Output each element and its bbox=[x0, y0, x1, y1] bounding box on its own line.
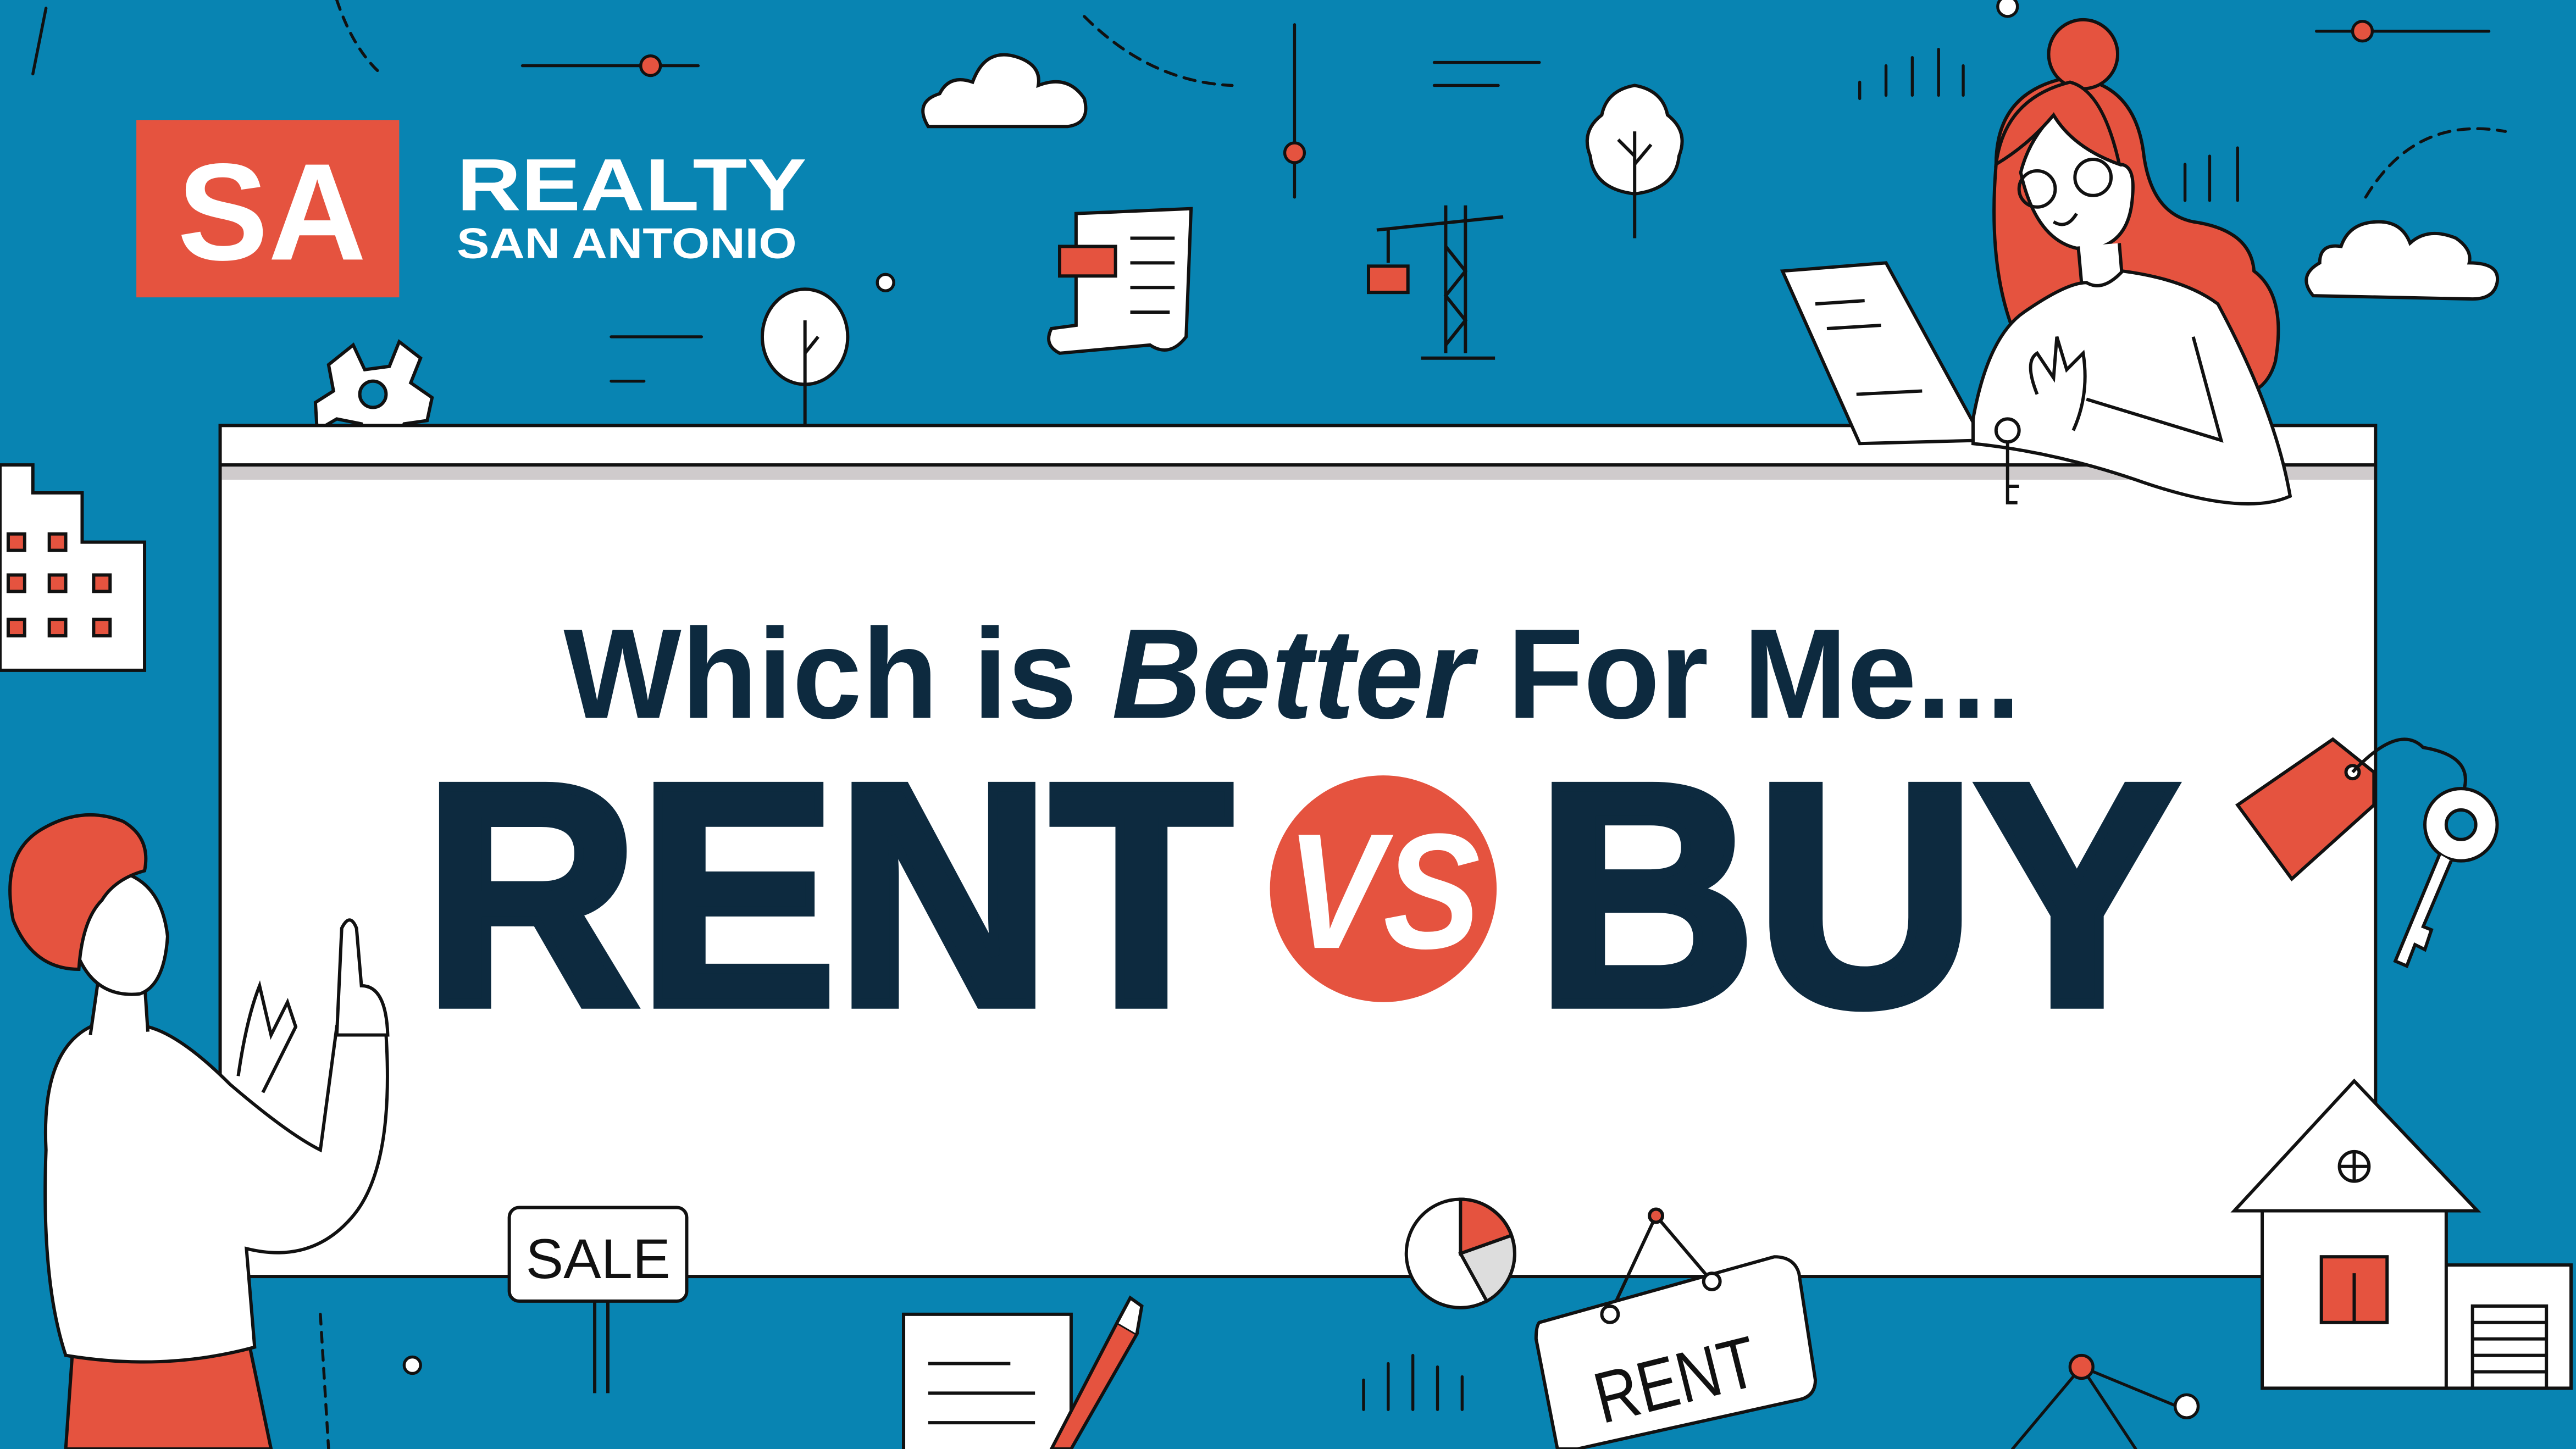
icon: pie chart bbox=[1406, 1200, 1515, 1308]
icon: document with red tag bbox=[1049, 209, 1191, 353]
icon: house bbox=[2234, 1081, 2571, 1388]
icon: tree bbox=[1587, 85, 1682, 238]
heading: which is better: Which is Better For Me... bbox=[563, 603, 2021, 746]
man illustration bbox=[10, 815, 387, 1449]
icon: price tag bbox=[2237, 739, 2466, 879]
icon: balloon tree bbox=[762, 289, 847, 430]
icon: sale sign bbox=[509, 1208, 686, 1393]
logo bbox=[136, 120, 807, 297]
logo: SA bbox=[178, 135, 367, 289]
icon: vs circle: VS bbox=[1287, 800, 1481, 983]
heading: RENT: RENT bbox=[424, 718, 1232, 1071]
logo: SAN ANTONIO bbox=[457, 220, 797, 267]
icon: crane bbox=[1369, 206, 1503, 358]
icon: sale sign: SALE bbox=[526, 1228, 671, 1290]
heading: BUY: BUY bbox=[1536, 718, 2179, 1071]
icon: building bbox=[0, 465, 145, 670]
icon: gear bbox=[315, 342, 432, 447]
paper held bbox=[1782, 263, 1983, 443]
icon: paper and pen bbox=[904, 1298, 1142, 1449]
face bbox=[2021, 115, 2133, 249]
neck bbox=[2078, 243, 2123, 289]
panel: main board bbox=[220, 425, 2375, 1276]
icon: key bbox=[2395, 789, 2497, 966]
logo: REALTY bbox=[457, 143, 807, 226]
body bbox=[1973, 271, 2290, 504]
icon: rent sign: RENT bbox=[1586, 1320, 1765, 1439]
hair back bbox=[1994, 77, 2278, 396]
icon: clouds bbox=[923, 55, 2497, 299]
woman illustration bbox=[1782, 20, 2290, 504]
icon: rent sign bbox=[1536, 1209, 1815, 1449]
